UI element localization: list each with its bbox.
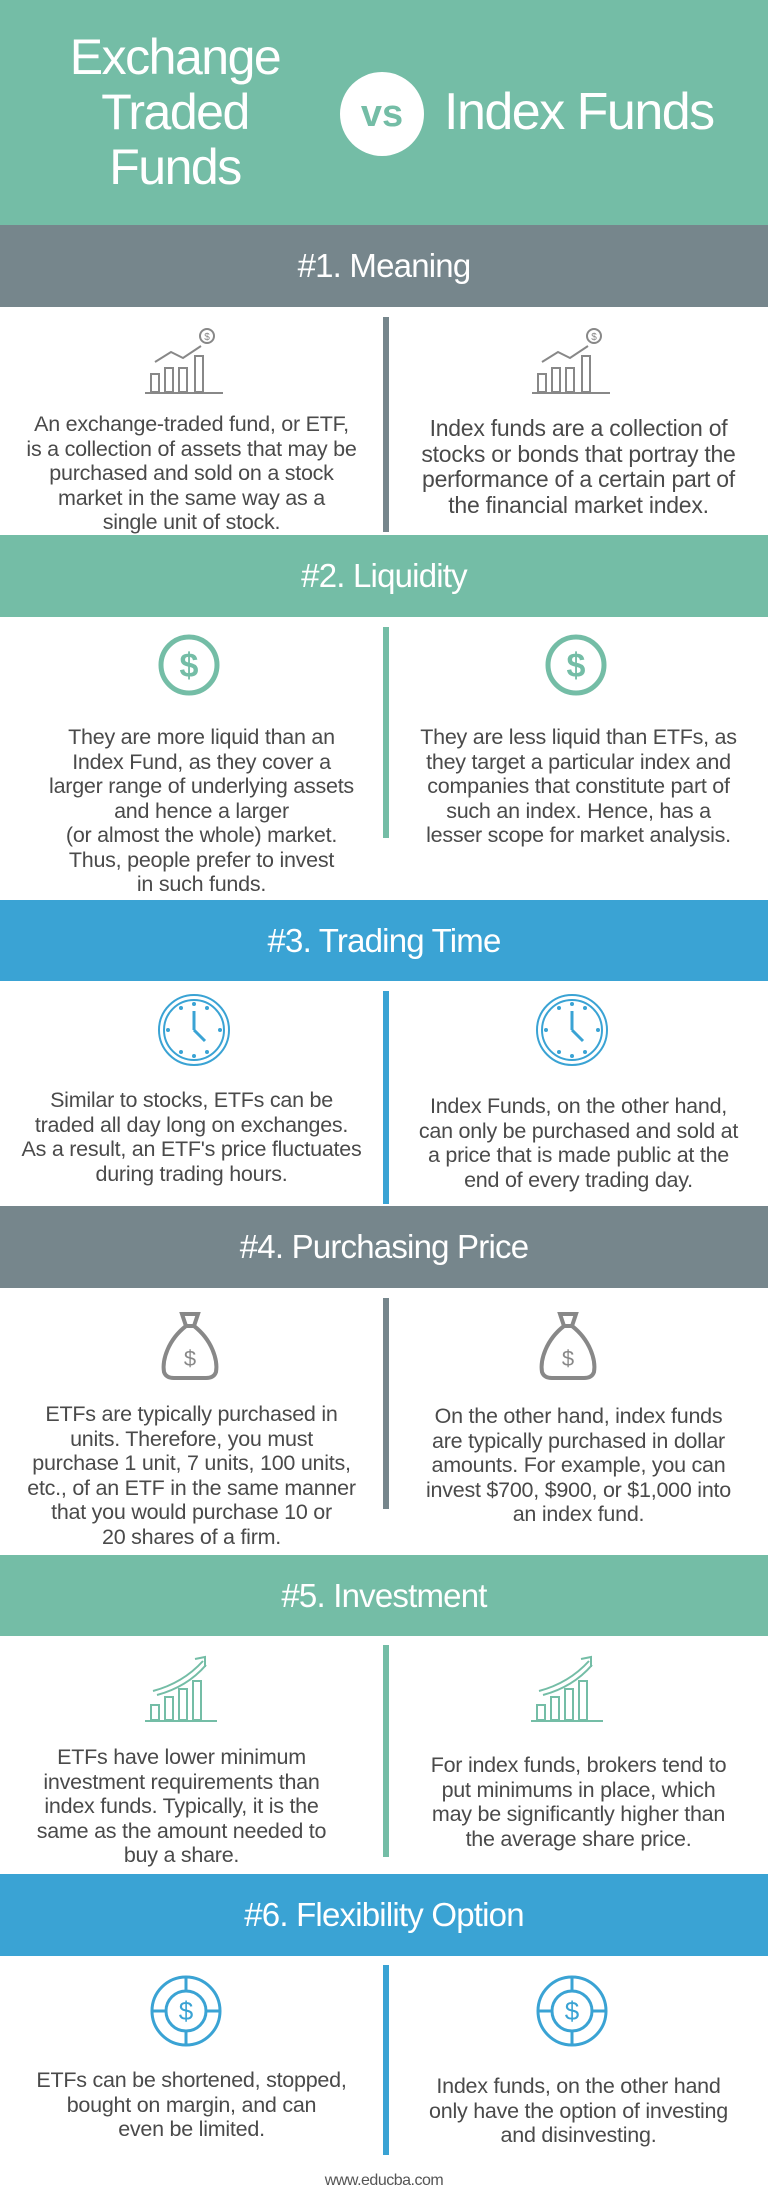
text: Index investment: put minimums in place, which — [442, 1778, 715, 1802]
text: Index investment: the average share price. — [466, 1826, 691, 1850]
text: ETF trading: As a result, an ETF's price fluctuates — [22, 1137, 361, 1161]
text: Index purchasing: amounts. For example, you can — [432, 1453, 725, 1477]
icon: growth chart right — [531, 1656, 603, 1722]
icon: chart right: $ — [591, 332, 597, 343]
text: ETF flexibility — [36, 2068, 347, 2141]
text: ETF trading: during trading hours. — [96, 1162, 287, 1186]
icon: clock left — [158, 994, 230, 1066]
text: Index purchasing — [426, 1404, 731, 1526]
text: ETF investment: investment requirements than — [43, 1770, 320, 1794]
text: ETF liquidity: (or almost the whole) market. — [66, 823, 337, 847]
text: Index trading: end of every trading day. — [464, 1168, 693, 1192]
text: Index purchasing: On the other hand, index funds — [435, 1404, 722, 1428]
divider — [383, 1298, 389, 1509]
section header: Flexibility Option — [0, 1874, 768, 1956]
text: ETF trading — [22, 1088, 361, 1186]
text: ETF flexibility: ETFs can be shortened, stopped, — [36, 2068, 347, 2092]
text: ETF purchasing: 20 shares of a firm. — [102, 1524, 281, 1548]
section header: Purchasing Price: #4. Purchasing Price — [240, 1228, 528, 1265]
text: Index meaning: performance of a certain part of — [422, 466, 735, 492]
icon: chart left: $ — [204, 332, 210, 343]
icon: dollar right: $ — [567, 647, 586, 685]
icon: dollar left — [158, 634, 220, 696]
icon: money bag right — [540, 1312, 596, 1380]
text: ETF investment — [37, 1745, 326, 1867]
text: Index meaning: Index funds are a collection of — [430, 415, 727, 441]
icon: coin target right — [536, 1976, 608, 2046]
section header: Investment: #5. Investment — [281, 1577, 487, 1614]
text: ETF investment: same as the amount needed to — [37, 1818, 326, 1842]
text: ETF meaning: market in the same way as a — [58, 486, 325, 510]
text: Index flexibility: only have the option of investing — [429, 2098, 728, 2122]
text: ETF liquidity: and hence a larger — [114, 798, 289, 822]
icon: clock right — [536, 994, 608, 1066]
text: Index flexibility: Index funds, on the other hand — [436, 2074, 721, 2098]
title: Exchange Traded Funds: Exchange — [70, 29, 280, 85]
icon: chart left — [145, 328, 223, 394]
text: ETF purchasing: that you would purchase 10 or — [51, 1500, 332, 1524]
text: Index flexibility — [429, 2074, 728, 2147]
text: ETF investment: index funds. Typically, it is the — [44, 1794, 319, 1818]
icon: money bag left — [162, 1312, 218, 1380]
icon: dollar left: $ — [180, 647, 199, 685]
icon: money bag left: $ — [184, 1346, 196, 1371]
vs circle: vs — [361, 93, 403, 135]
text: ETF liquidity: larger range of underlying assets — [49, 774, 354, 798]
text: Index purchasing: an index fund. — [513, 1502, 644, 1526]
text: Index liquidity: such an index. Hence, has a — [446, 798, 711, 822]
text: Index liquidity: they target a particular index and — [426, 750, 731, 774]
section header: Trading Time: #3. Trading Time — [268, 922, 500, 959]
text: Index trading — [419, 1094, 738, 1192]
text: Index investment: For index funds, brokers tend to — [431, 1753, 726, 1777]
section header: Meaning — [0, 225, 768, 307]
section header: Flexibility Option: #6. Flexibility Option — [244, 1896, 524, 1933]
divider — [383, 1645, 389, 1857]
text: ETF trading: Similar to stocks, ETFs can be — [50, 1088, 333, 1112]
section header: Investment — [0, 1555, 768, 1636]
text: Index meaning: stocks or bonds that portray the — [421, 440, 736, 466]
text: ETF purchasing: etc., of an ETF in the same manner — [27, 1476, 356, 1500]
section header: Meaning: #1. Meaning — [298, 247, 470, 284]
vs circle — [340, 72, 424, 156]
text: ETF purchasing: purchase 1 unit, 7 units, 100 units, — [32, 1451, 351, 1475]
divider — [383, 627, 389, 838]
text: Index trading: can only be purchased and sold at — [419, 1118, 738, 1142]
text: Index investment: may be significantly higher than — [432, 1802, 725, 1826]
divider — [383, 317, 389, 532]
text: ETF meaning: is a collection of assets that may be — [26, 436, 357, 460]
text: Index purchasing: are typically purchased in dollar — [432, 1428, 725, 1452]
text: ETF liquidity: in such funds. — [137, 872, 266, 896]
section header: Purchasing Price — [0, 1206, 768, 1288]
icon: dollar right — [546, 634, 606, 696]
section header: Trading Time — [0, 900, 768, 981]
icon: coin target left: $ — [179, 1996, 194, 2026]
text: Index meaning — [421, 415, 736, 518]
header banner — [0, 0, 768, 225]
text: Index meaning: the financial market index. — [448, 492, 709, 518]
title: Exchange Traded Funds — [70, 29, 280, 195]
text: Index investment — [431, 1753, 726, 1850]
text: ETF meaning: purchased and sold on a stock — [49, 461, 334, 485]
footer: www.educba.com — [325, 2172, 443, 2189]
text: Index liquidity: companies that constitute part of — [427, 774, 730, 798]
icon: growth chart left — [145, 1656, 217, 1722]
text: ETF investment: ETFs have lower minimum — [57, 1745, 306, 1769]
icon: money bag right: $ — [562, 1346, 574, 1371]
text: Index liquidity — [420, 725, 737, 847]
text: ETF purchasing: ETFs are typically purchased in — [45, 1402, 338, 1426]
title: Index Funds: Index Funds — [444, 83, 714, 141]
text: ETF liquidity: They are more liquid than an — [68, 725, 335, 749]
text: ETF flexibility: bought on margin, and can — [67, 2092, 316, 2116]
title: Exchange Traded Funds: Traded — [101, 84, 249, 140]
text: ETF liquidity — [49, 725, 354, 896]
title: Exchange Traded Funds: Funds — [109, 139, 241, 195]
text: ETF purchasing: units. Therefore, you must — [70, 1426, 313, 1450]
divider — [383, 1965, 389, 2155]
text: Index trading: Index Funds, on the other hand, — [430, 1094, 727, 1118]
text: Index purchasing: invest $700, $900, or $1,000 into — [426, 1478, 731, 1502]
text: ETF meaning — [26, 412, 357, 534]
icon: coin target right: $ — [565, 1996, 580, 2026]
text: ETF meaning: single unit of stock. — [103, 510, 280, 534]
icon: chart right — [532, 328, 610, 394]
section header: Liquidity: #2. Liquidity — [301, 557, 467, 594]
text: Index liquidity: lesser scope for market analysis. — [426, 823, 731, 847]
text: Index trading: a price that is made public at the — [428, 1143, 729, 1167]
text: ETF trading: traded all day long on exchanges. — [35, 1112, 348, 1136]
text: ETF purchasing — [27, 1402, 356, 1548]
text: ETF flexibility: even be limited. — [118, 2117, 265, 2141]
icon: coin target left — [150, 1976, 222, 2046]
section header: Liquidity — [0, 535, 768, 617]
text: ETF liquidity: Index Fund, as they cover a — [72, 750, 331, 774]
text: ETF liquidity: Thus, people prefer to invest — [69, 848, 334, 872]
text: ETF investment: buy a share. — [124, 1843, 239, 1867]
text: Index liquidity: They are less liquid than ETFs, as — [420, 725, 737, 749]
text: ETF meaning: An exchange-traded fund, or ETF, — [34, 412, 349, 436]
text: Index flexibility: and disinvesting. — [501, 2123, 656, 2147]
divider — [383, 991, 389, 1204]
